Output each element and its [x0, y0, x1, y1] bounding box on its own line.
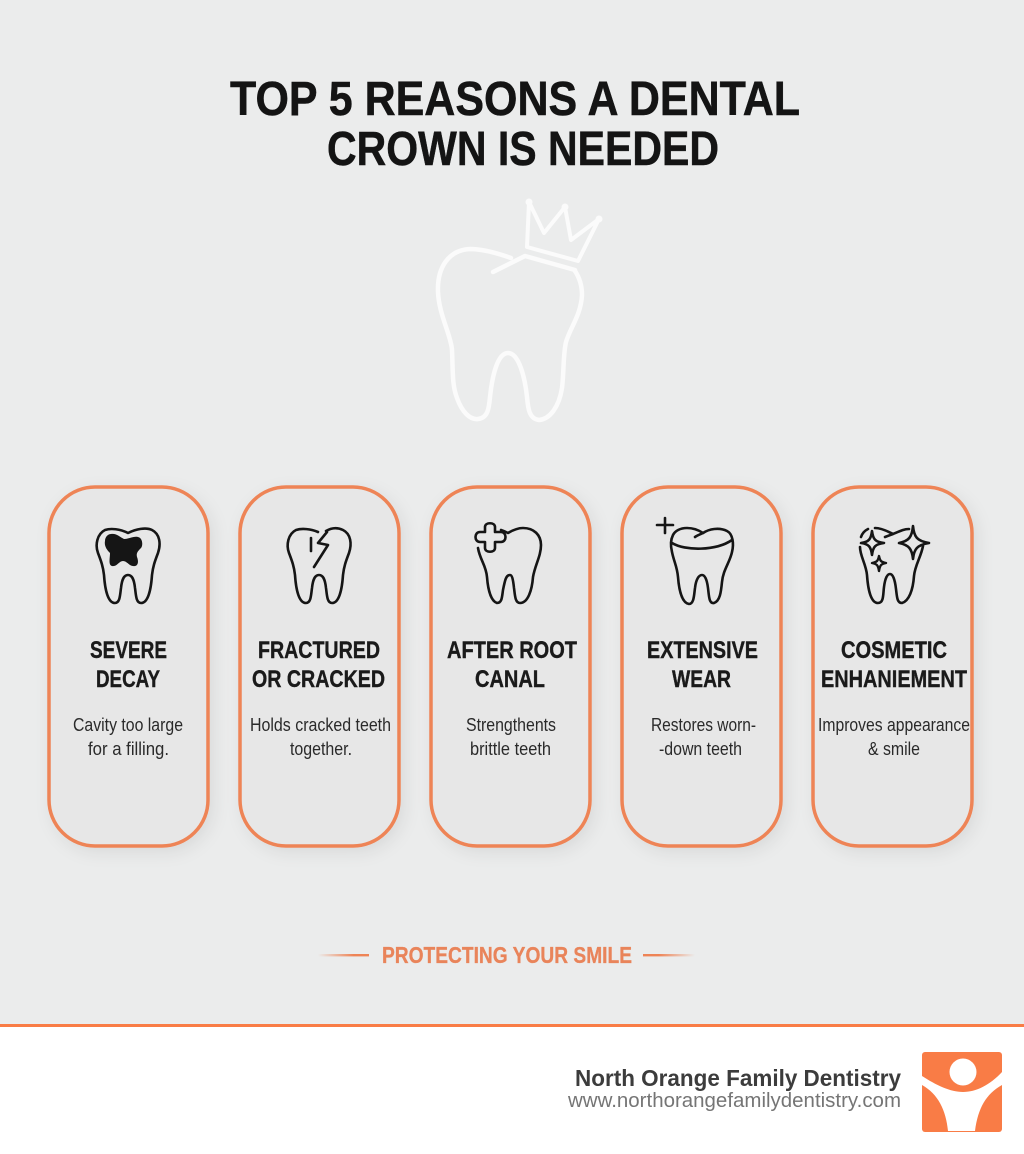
icon: tooth with cavity [97, 529, 160, 603]
panel: severe decay: DECAY [96, 666, 160, 693]
panel: fractured or cracked: OR CRACKED [252, 666, 385, 693]
panel: extensive wear [622, 487, 781, 846]
panel: extensive wear: WEAR [672, 666, 731, 693]
panel: extensive wear: EXTENSIVE [647, 637, 758, 664]
panel: after root canal: Strengthents [466, 715, 556, 735]
panel: cosmetic enhancement: COSMETIC [841, 637, 947, 664]
panel: fractured or cracked: Holds cracked teeth [250, 715, 391, 735]
panel: after root canal: CANAL [475, 666, 545, 693]
panel: after root canal: AFTER ROOT [447, 637, 577, 664]
panel: after root canal [431, 487, 590, 846]
logo [922, 1052, 1002, 1132]
panel: after root canal: brittle teeth [470, 739, 551, 759]
panel: fractured or cracked: FRACTURED [258, 637, 380, 664]
icon: sparkling tooth [860, 526, 929, 603]
website: www.northorangefamilydentistry.com [567, 1090, 901, 1112]
tagline: PROTECTING YOUR SMILE [382, 942, 632, 968]
footer [0, 1024, 1024, 1154]
panel: cosmetic enhancement: & smile [868, 739, 920, 759]
panel: cosmetic enhancement [813, 487, 972, 846]
panel: fractured or cracked: together. [290, 739, 352, 759]
title: TOP 5 REASONS A DENTAL [230, 73, 800, 126]
icon: white tooth with crown [438, 198, 602, 420]
panel: severe decay [49, 487, 208, 846]
panel: extensive wear: -down teeth [659, 739, 742, 759]
panel: severe decay: SEVERE [90, 637, 167, 664]
panel: cosmetic enhancement: ENHANIEMENT [821, 666, 967, 693]
panel: severe decay: for a filling. [88, 739, 169, 759]
company name: North Orange Family Dentistry [575, 1065, 901, 1091]
panel: fractured or cracked [240, 487, 399, 846]
icon: worn tooth [657, 518, 733, 604]
panel: severe decay: Cavity too large [73, 715, 183, 735]
title: CROWN IS NEEDED [327, 123, 719, 176]
title [230, 73, 800, 176]
icon: tooth with medical cross [476, 523, 541, 603]
panel: extensive wear: Restores worn- [651, 715, 756, 735]
panel: cosmetic enhancement: Improves appearance [818, 715, 970, 735]
icon: cracked tooth [288, 528, 351, 603]
